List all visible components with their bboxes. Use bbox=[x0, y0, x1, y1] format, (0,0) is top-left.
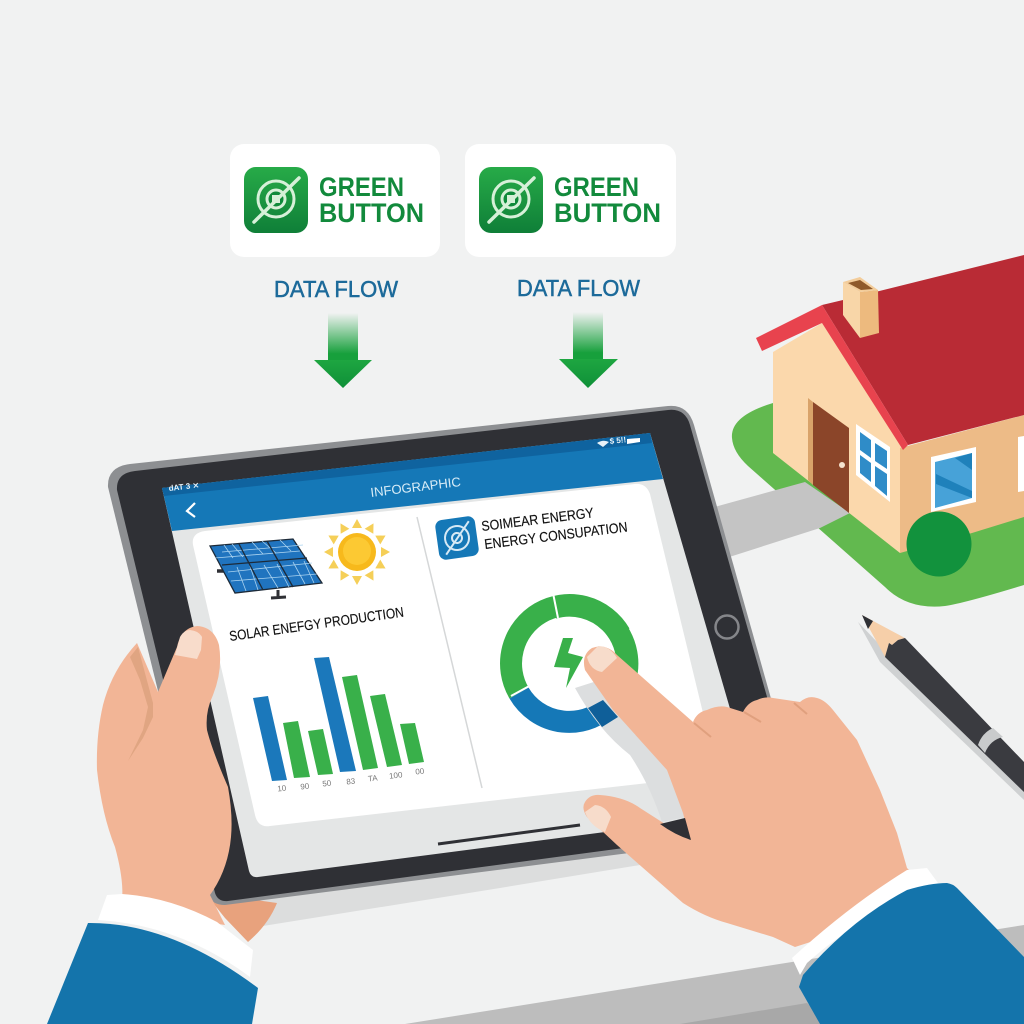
consumption logo icon bbox=[434, 515, 480, 561]
arrow 2 bbox=[559, 312, 618, 388]
green button wordmark: BUTTON bbox=[319, 198, 424, 228]
chart axis labels: 10 bbox=[277, 784, 287, 793]
solar panel bbox=[210, 539, 322, 598]
bar chart bbox=[253, 657, 425, 793]
green button wordmark: GREEN bbox=[554, 172, 639, 202]
chart axis labels: 50 bbox=[322, 779, 332, 788]
consumption heading: ENERGY CONSUPATION bbox=[483, 519, 628, 552]
house bbox=[756, 255, 1024, 576]
chart axis labels: 90 bbox=[300, 782, 310, 791]
screen bbox=[162, 433, 760, 877]
side window bbox=[931, 447, 976, 512]
chart axis labels: 83 bbox=[346, 777, 356, 786]
chart axis labels: TA bbox=[367, 773, 379, 783]
status bar: $ 5!! bbox=[609, 435, 627, 446]
chart axis labels: 100 bbox=[389, 770, 403, 781]
tablet shadow bbox=[230, 840, 690, 926]
bush bbox=[906, 512, 972, 576]
index finger nail bbox=[587, 646, 617, 672]
finger shadow bbox=[575, 680, 690, 822]
green button icon bbox=[479, 167, 543, 233]
dark bezel notch bbox=[660, 818, 691, 840]
consumption heading bbox=[480, 504, 628, 552]
driveway bbox=[700, 482, 850, 560]
consumption heading: SOIMEAR ENERGY bbox=[480, 504, 595, 534]
table edge band bbox=[405, 925, 1024, 1024]
green button wordmark bbox=[319, 172, 424, 228]
header title: INFOGRAPHIC bbox=[370, 474, 462, 500]
left palm fold behind tablet bbox=[205, 893, 277, 942]
thumb nail bbox=[585, 805, 611, 832]
green button icon bbox=[244, 167, 308, 233]
right cuff bbox=[792, 868, 938, 975]
gable wall bbox=[773, 323, 903, 553]
chart axis labels bbox=[277, 767, 425, 793]
gable window bbox=[856, 424, 890, 502]
tablet bbox=[108, 406, 808, 905]
divider bbox=[417, 517, 482, 788]
content card bbox=[193, 484, 718, 826]
arrow 1 bbox=[314, 313, 372, 388]
left sleeve bbox=[47, 923, 258, 1024]
left cuff bbox=[98, 894, 253, 977]
pencil bbox=[858, 615, 1024, 800]
chimney bbox=[843, 277, 879, 338]
right hand bbox=[583, 646, 940, 947]
lawn bbox=[732, 403, 1024, 607]
tablet bezel bbox=[117, 410, 803, 901]
lightning bolt bbox=[554, 638, 583, 688]
green button wordmark: GREEN bbox=[319, 172, 404, 202]
tablet casing bbox=[108, 406, 808, 905]
data flow label 1: DATA FLOW bbox=[274, 276, 398, 302]
thumb nail bbox=[175, 630, 202, 659]
back chevron bbox=[187, 503, 195, 517]
roof eave bbox=[756, 305, 908, 450]
roof bbox=[822, 255, 1024, 445]
left hand bbox=[97, 626, 232, 925]
home indicator bbox=[438, 825, 580, 844]
green button card 1 bbox=[230, 144, 440, 257]
chart axis labels: 00 bbox=[415, 767, 425, 776]
door bbox=[808, 398, 849, 513]
knuckle creases bbox=[694, 703, 807, 737]
green button card 2 bbox=[465, 144, 676, 257]
sun bbox=[324, 519, 390, 585]
green button wordmark bbox=[554, 172, 661, 228]
donut shaded segment bbox=[588, 700, 618, 727]
home button bbox=[716, 616, 738, 638]
far window bbox=[1018, 436, 1024, 492]
right sleeve bbox=[799, 883, 1024, 1024]
status bar: dAT 3 ⨯ bbox=[168, 481, 200, 493]
solar production heading: SOLAR ENEFGY PRODUCTION bbox=[228, 604, 405, 644]
status bar bbox=[162, 433, 652, 496]
data flow label 2: DATA FLOW bbox=[517, 275, 640, 301]
header bar bbox=[162, 433, 663, 531]
donut chart bbox=[511, 593, 627, 722]
green button wordmark: BUTTON bbox=[554, 198, 661, 228]
side wall bbox=[900, 415, 1024, 553]
palm crease bbox=[128, 647, 153, 761]
